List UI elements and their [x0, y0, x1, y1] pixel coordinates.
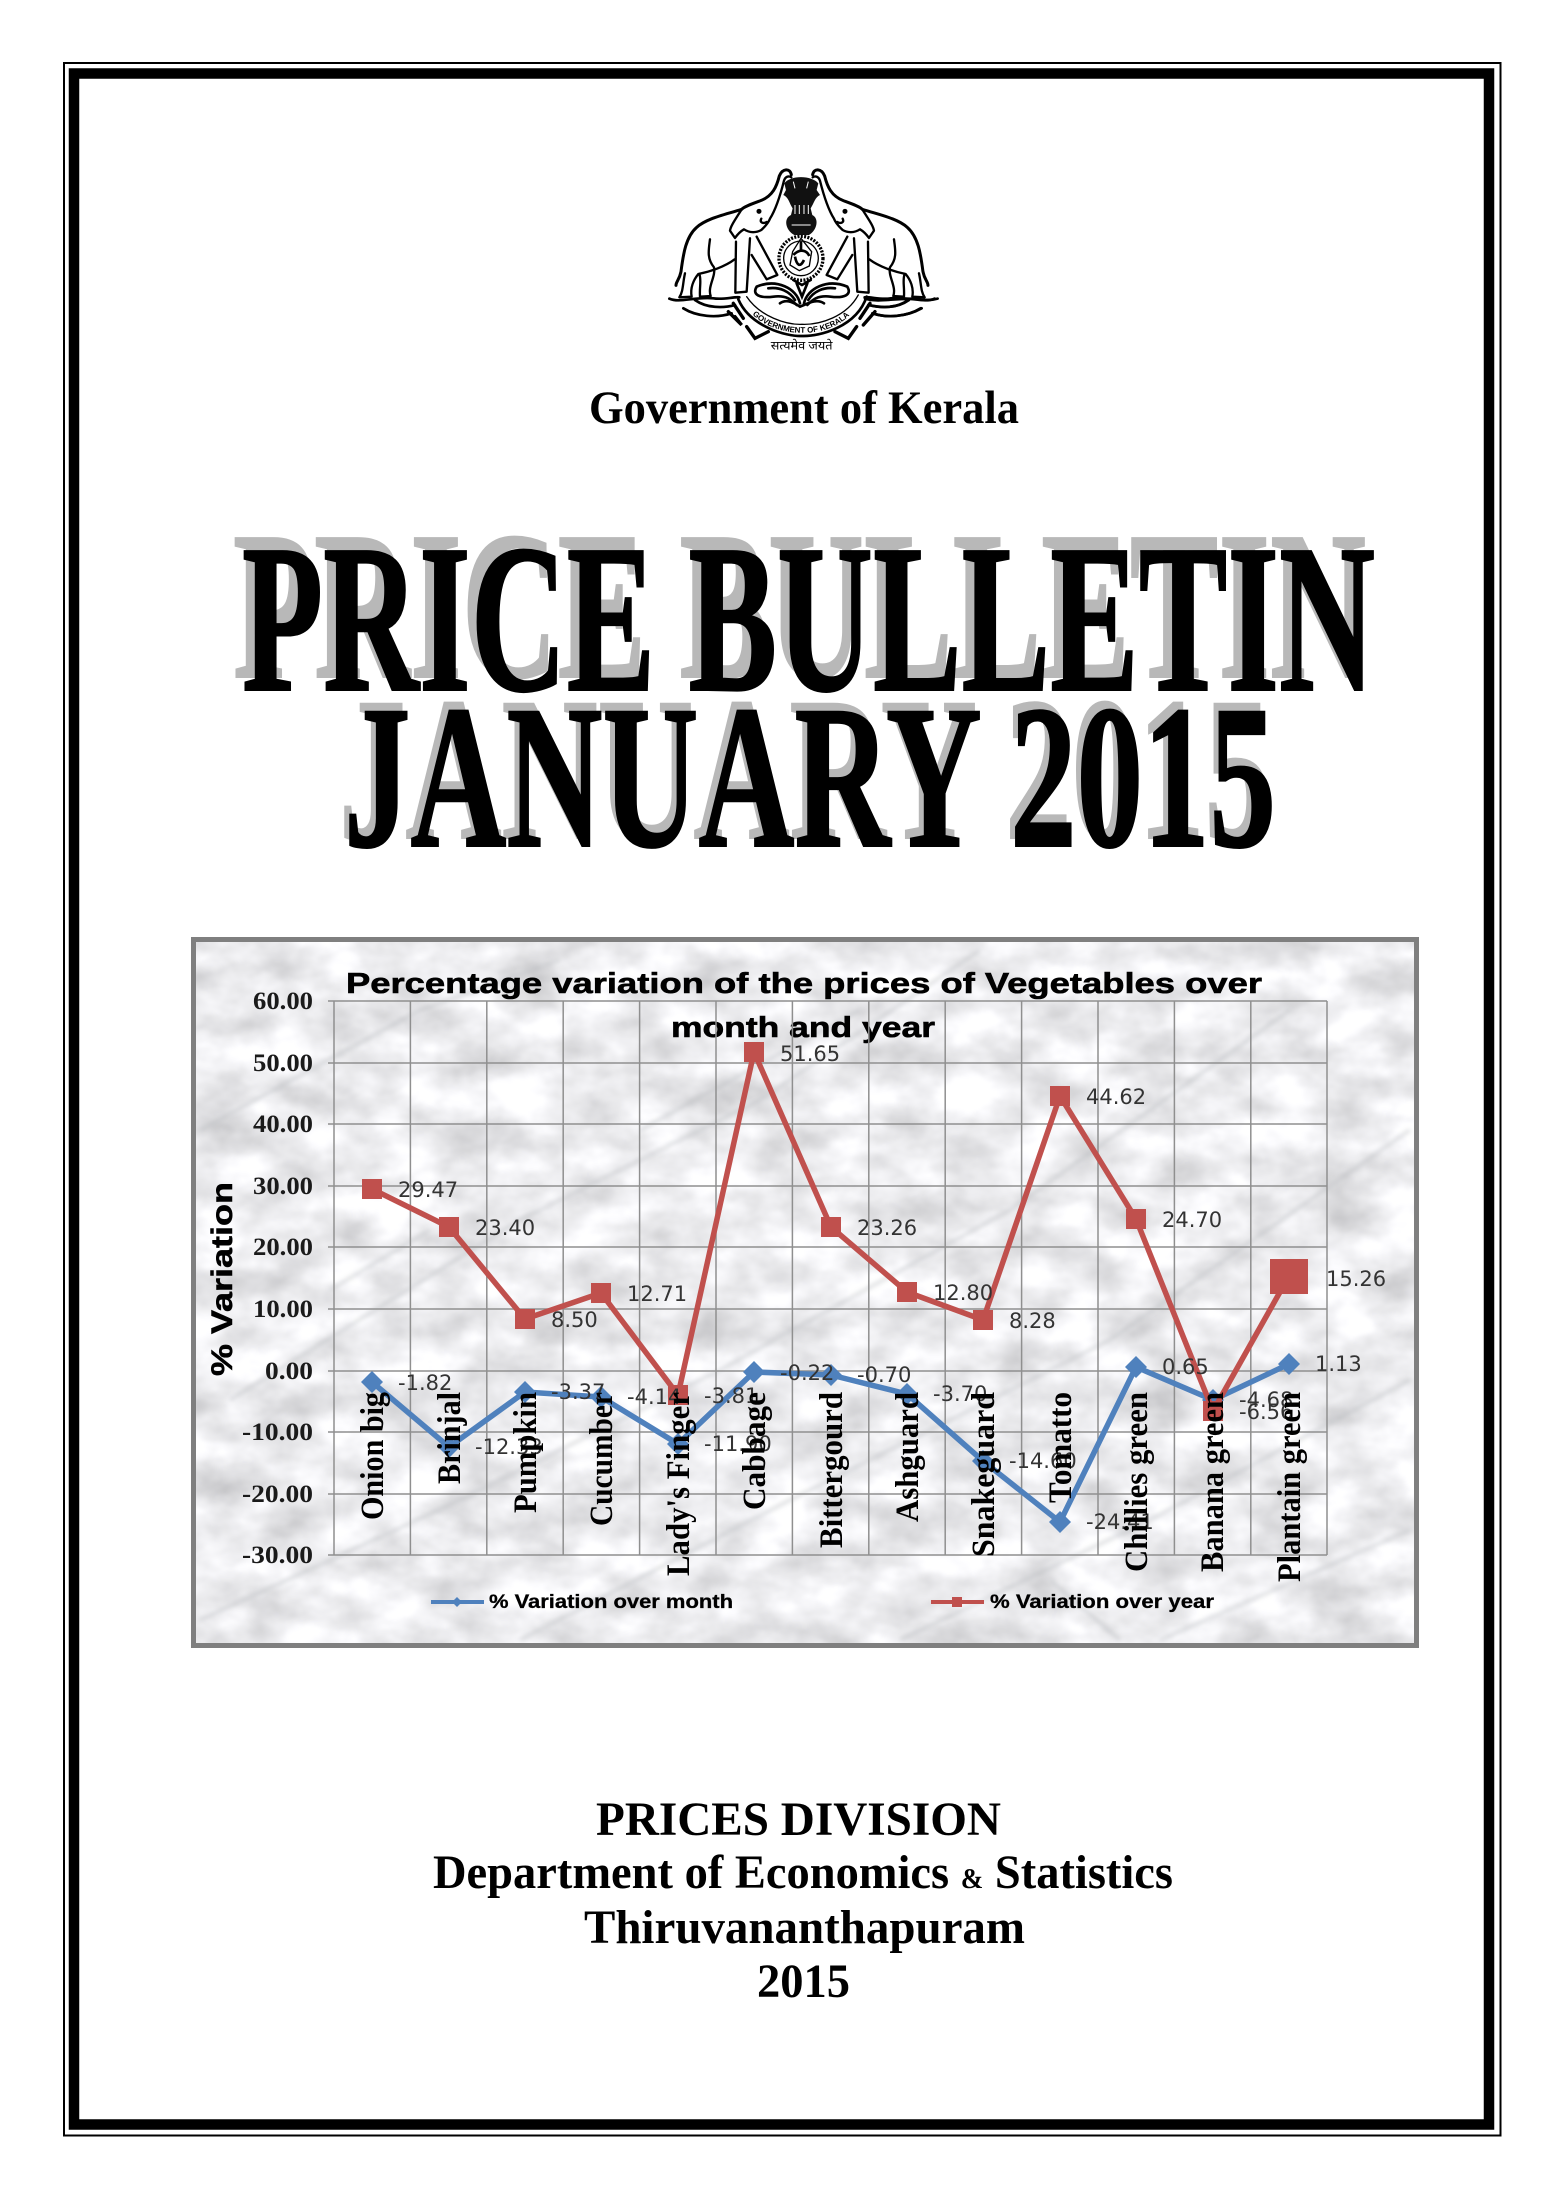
y axis tick labels: 20.00 [253, 1234, 313, 1261]
x axis category labels: Brinjal [432, 1392, 468, 1484]
chart title [346, 968, 1262, 1044]
data labels: variation over month: -11.90 [704, 1432, 772, 1456]
data labels: variation over month: -1.82 [398, 1371, 452, 1395]
footer: issuing office: Department of Economics & Statistics [433, 1846, 1173, 1899]
data labels: variation over year: 24.70 [1162, 1208, 1222, 1232]
chart background: marble [194, 940, 1416, 1646]
footer: issuing office: Thiruvananthapuram [584, 1901, 1025, 1954]
y axis tick labels: 30.00 [253, 1173, 313, 1200]
y axis tick labels: -10.00 [242, 1419, 313, 1446]
data labels: variation over month: -0.70 [857, 1363, 911, 1387]
x axis category labels: Snakeguard [966, 1392, 1002, 1557]
x axis category labels: Onion big [355, 1392, 391, 1520]
x axis category labels: Ashguard [890, 1392, 926, 1522]
legend: variation over month [431, 1592, 733, 1613]
data labels: variation over month: 0.65 [1162, 1355, 1209, 1379]
x axis category labels: Tomatto [1043, 1392, 1079, 1503]
data labels: variation over month: -24.41 [1086, 1510, 1154, 1534]
emblem: wreathed conch [779, 236, 823, 280]
series: variation over year (red) [362, 1042, 1308, 1421]
x axis category labels: Bittergourd [814, 1392, 850, 1548]
heading: Government of Kerala: Government of Kerala [589, 382, 1019, 434]
data labels: variation over month [398, 1352, 1362, 1534]
y axis title: % Variation [206, 1182, 239, 1376]
data labels: variation over month: -12.33 [475, 1435, 543, 1459]
icon: Kerala state emblem [668, 168, 939, 352]
data labels: variation over year: 23.40 [475, 1216, 535, 1240]
data labels: variation over year: 8.50 [551, 1308, 598, 1332]
icon: Kerala state emblem: GOVERNMENT OF KERALA [754, 312, 850, 333]
emblem: lion capital [783, 177, 820, 235]
data labels: variation over year: 12.80 [933, 1281, 993, 1305]
x axis category labels: Banana green [1195, 1392, 1231, 1572]
data labels: variation over year: 15.26 [1326, 1267, 1386, 1291]
chart title: month and year [671, 1012, 935, 1044]
legend: variation over year [931, 1592, 1215, 1613]
data labels: variation over year: 23.26 [857, 1216, 917, 1240]
emblem: ribbon motto [743, 303, 858, 333]
legend: variation over month: % Variation over month [489, 1592, 733, 1613]
y axis tick labels: -30.00 [242, 1542, 313, 1569]
data labels: variation over year: -6.56 [1239, 1400, 1293, 1424]
y axis tick labels: -20.00 [242, 1481, 313, 1508]
x axis category labels: Chillies green [1119, 1392, 1155, 1572]
y axis tick labels: 0.00 [265, 1358, 313, 1385]
data labels: variation over year: -3.81 [704, 1384, 758, 1408]
plot gridlines [328, 1001, 1327, 1555]
data labels: variation over year: 29.47 [398, 1178, 458, 1202]
x axis category labels [355, 1392, 1308, 1582]
x axis category labels: Plantain green [1272, 1392, 1308, 1582]
x axis category labels: Cucumber [584, 1392, 620, 1526]
data labels: variation over month: -0.22 [780, 1361, 834, 1385]
data labels: variation over year: 51.65 [780, 1042, 840, 1066]
chart title: Percentage variation of the prices of Vegetables over [346, 968, 1262, 1000]
data labels: variation over month: -3.70 [933, 1382, 987, 1406]
x axis category labels: Cabbage [737, 1392, 773, 1510]
data labels: variation over month: -3.37 [551, 1380, 605, 1404]
x axis category labels: Pumpkin [508, 1392, 544, 1513]
x axis category labels: Lady's Finger [661, 1392, 697, 1576]
panel: chart [194, 940, 1416, 1646]
data labels: variation over month: -4.68 [1239, 1388, 1293, 1412]
chart frame [194, 940, 1416, 1646]
footer: issuing office: 2015 [757, 1955, 850, 2008]
marble veins [200, 950, 1410, 1640]
emblem: scrollwork [728, 280, 938, 338]
footer: issuing office [433, 1793, 1173, 2008]
data labels: variation over month: -14.60 [1009, 1449, 1077, 1473]
data labels: variation over year: 12.71 [627, 1282, 687, 1306]
data labels: variation over year: 44.62 [1086, 1085, 1146, 1109]
legend: variation over year: % Variation over year [990, 1592, 1215, 1613]
y axis tick labels: 10.00 [253, 1296, 313, 1323]
footer: issuing office: PRICES DIVISION [596, 1793, 1001, 1846]
data labels: variation over year: 8.28 [1009, 1309, 1056, 1333]
y axis tick labels: 50.00 [253, 1050, 313, 1077]
data labels: variation over month: -4.14 [627, 1385, 681, 1409]
emblem: motto: सत्यमेव जयते [771, 338, 833, 352]
y axis tick labels: 40.00 [253, 1111, 313, 1138]
data labels: variation over year [398, 1042, 1386, 1424]
y axis tick labels [242, 988, 313, 1569]
series: variation over month (blue) [361, 1353, 1300, 1533]
data labels: variation over month: 1.13 [1315, 1352, 1362, 1376]
y axis tick labels: 60.00 [253, 988, 313, 1015]
